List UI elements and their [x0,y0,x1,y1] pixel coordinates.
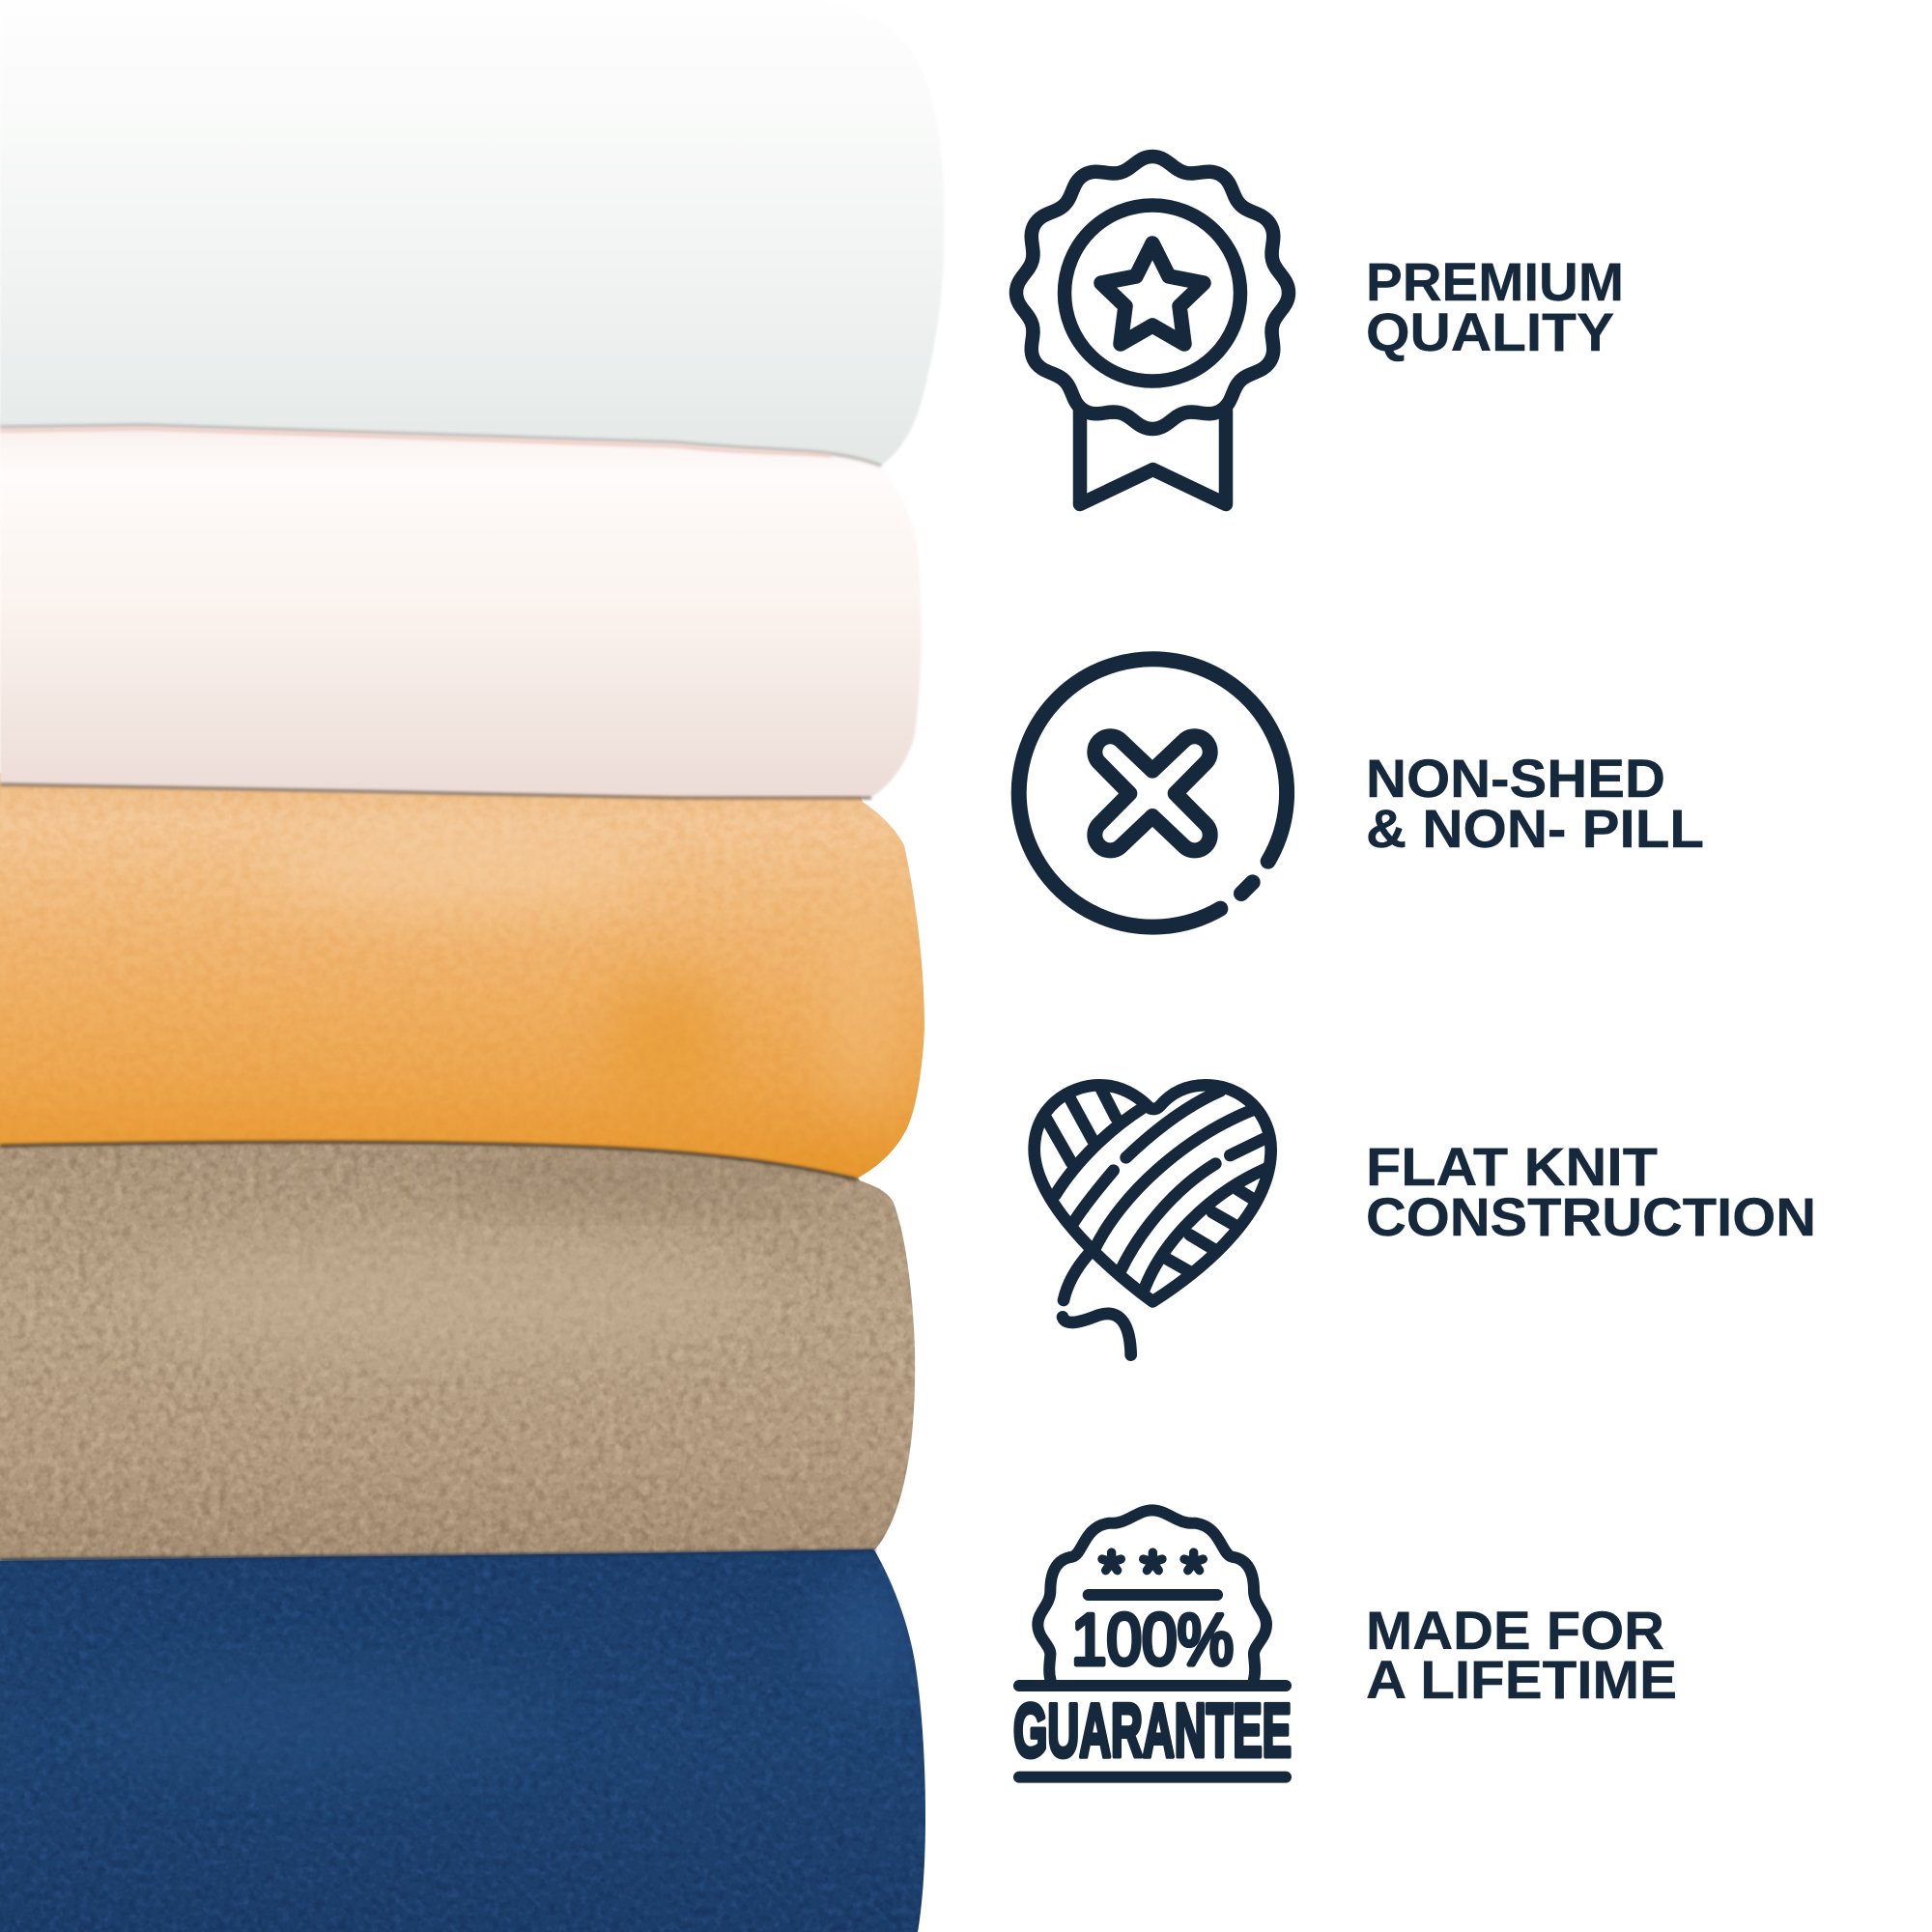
blanket: blush pink [0,415,921,798]
label: made for a lifetime [1366,1600,1677,1710]
label: premium quality: PREMIUM [1366,251,1624,312]
label: non-shed and non-pill [1366,748,1704,859]
blanket: orange [0,773,924,1179]
label: non-shed and non-pill: & NON- PILL [1366,798,1704,859]
label: premium quality: QUALITY [1366,301,1614,362]
icon: 100% guarantee badge: GUARANTEE [1013,1688,1292,1773]
label: made for a lifetime: A LIFETIME [1366,1649,1677,1710]
blanket: navy [0,1546,925,1932]
icon: yarn ball heart [1035,1085,1271,1355]
icon: 100% guarantee badge: 100% [1071,1599,1234,1680]
label: flat knit construction [1366,1136,1816,1247]
label: non-shed and non-pill: NON-SHED [1366,748,1665,809]
label: flat knit construction: CONSTRUCTION [1366,1186,1816,1247]
label: premium quality [1366,251,1624,362]
icon: circled X [1019,659,1287,927]
blanket: taupe [0,1135,915,1561]
icon: 100% guarantee badge [1013,1510,1292,1777]
panel: stack of folded blankets [0,0,945,1932]
blanket: white [0,0,945,466]
icon: premium rosette badge with star [1016,156,1289,504]
label: flat knit construction: FLAT KNIT [1366,1136,1658,1197]
label: made for a lifetime: MADE FOR [1366,1600,1664,1661]
